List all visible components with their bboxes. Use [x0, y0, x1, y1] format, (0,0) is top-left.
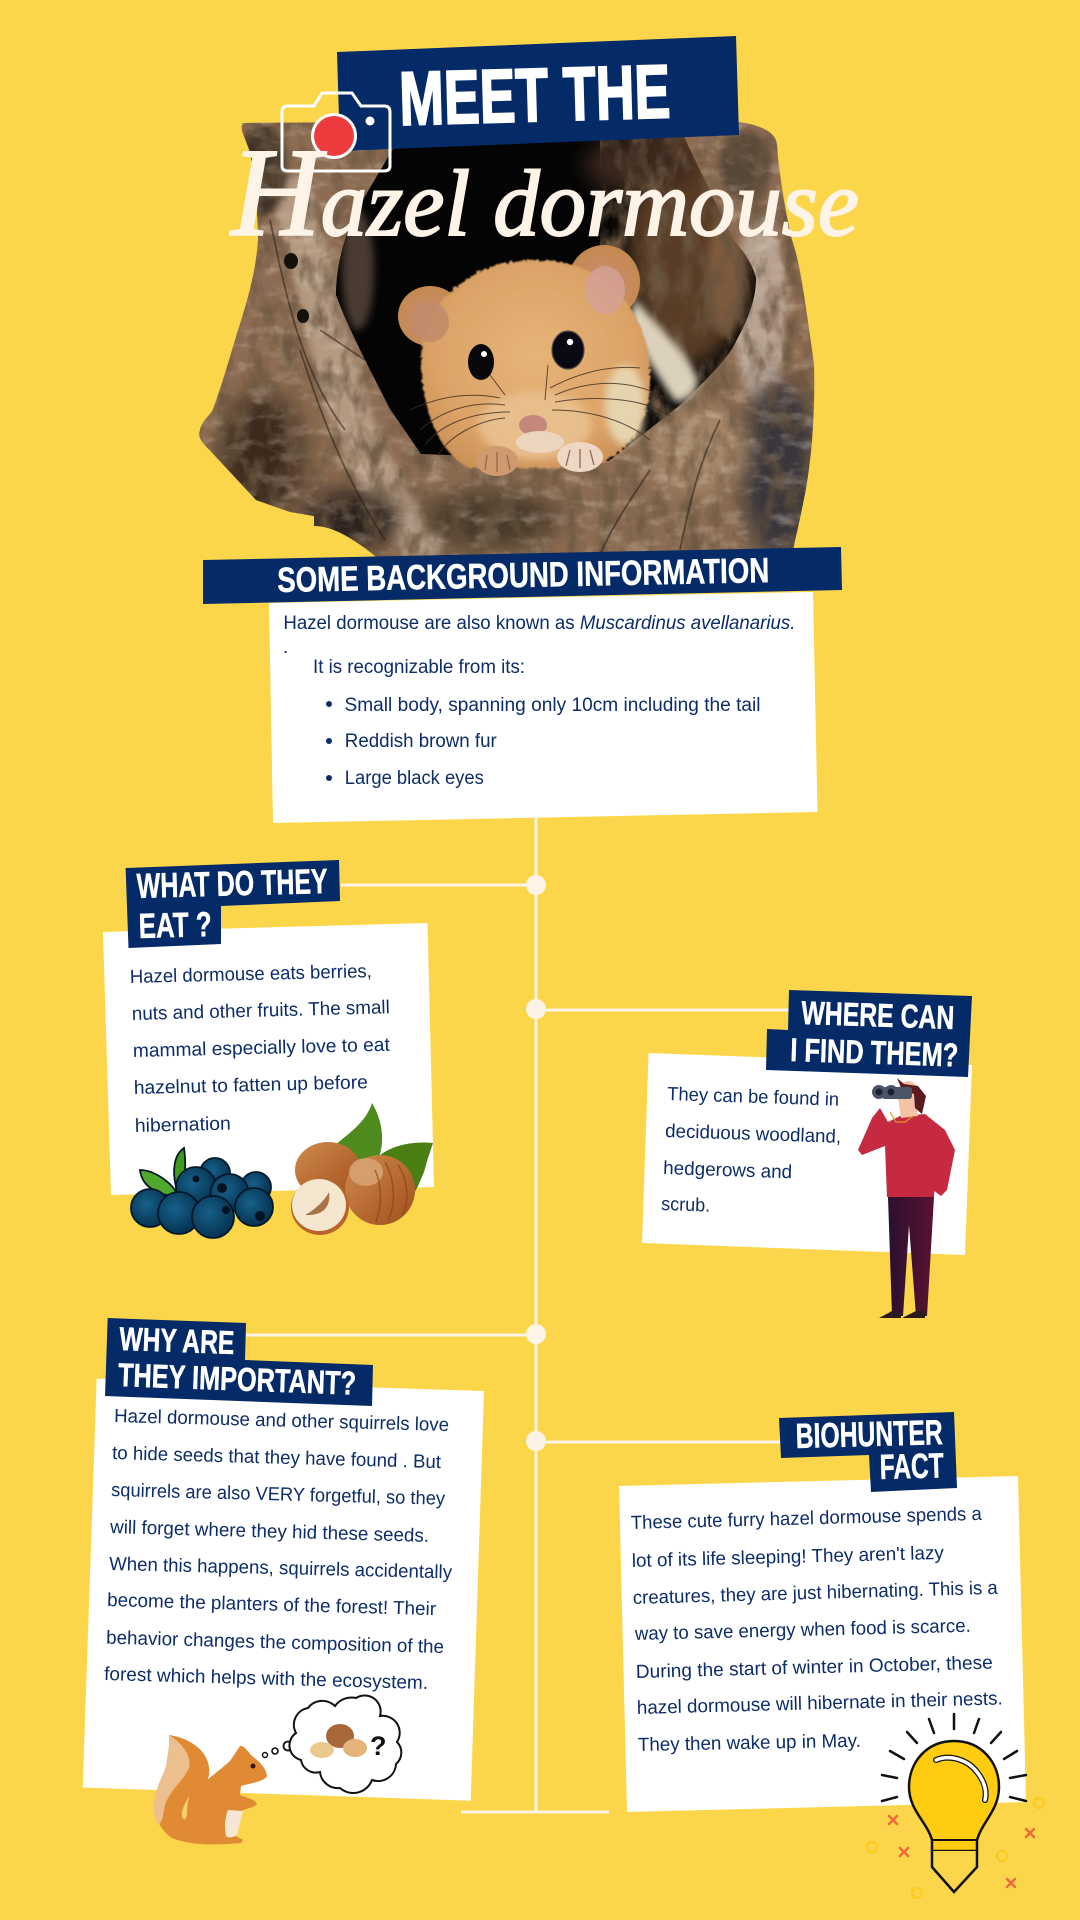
text: habitat: [661, 1084, 841, 1217]
text: importance: will forget where they hid these seeds.: [109, 1517, 429, 1547]
text: diet: Hazel dormouse eats berries,: [130, 961, 372, 988]
text: habitat: hedgerows and: [663, 1158, 792, 1183]
text: importance: behavior changes the composition of the: [106, 1628, 444, 1658]
text: diet: mammal especially love to eat: [133, 1035, 391, 1062]
title banner: meet the: MEET THE: [398, 49, 671, 142]
text: fact: These cute furry hazel dormouse spends a: [631, 1504, 982, 1534]
text: fact: way to save energy when food is scarce.: [634, 1616, 971, 1645]
heading: biohunter fact: BIOHUNTER: [795, 1413, 943, 1456]
heading: biohunter fact: FACT: [879, 1446, 944, 1487]
icon: hazelnuts: [291, 1103, 433, 1235]
icon: man with binoculars: [858, 1078, 955, 1318]
timeline connector: [246, 815, 790, 1812]
text: recognizable intro: It is recognizable from its:: [313, 657, 525, 678]
icon: light bulb: [882, 1714, 1026, 1892]
text: importance: When this happens, squirrels accidentally: [109, 1554, 453, 1583]
icon: camera: [282, 93, 390, 171]
title banner: meet the: [337, 36, 739, 151]
icon: thought bubble with nuts: ?: [370, 1731, 386, 1761]
text: background intro: Hazel dormouse are also known as Muscardinus avellanarius.: [283, 613, 795, 634]
panel: background information: [203, 547, 842, 823]
photo: dormouse in tree hollow: [190, 110, 830, 570]
icon: sparkle marks: [867, 1798, 1044, 1898]
text: importance: [104, 1406, 453, 1694]
list: traits: Reddish brown fur: [345, 731, 497, 752]
dormouse: [398, 245, 698, 476]
text: importance: forest which helps with the ecosystem.: [104, 1664, 428, 1694]
text: diet: [130, 961, 391, 1137]
text: habitat: deciduous woodland,: [665, 1121, 841, 1148]
list: traits: [326, 695, 760, 789]
text: diet: hazelnut to fatten up before: [134, 1072, 368, 1099]
title script: hazel dormouse: Hazel dormouse: [229, 124, 859, 263]
text: habitat: They can be found in: [667, 1084, 839, 1111]
text: fact: creatures, they are just hibernating. This is a: [633, 1578, 998, 1609]
text: fact: During the start of winter in October, these: [636, 1653, 993, 1683]
panel: where can i find them: [642, 990, 972, 1318]
heading: why are they important: THEY IMPORTANT?: [117, 1356, 357, 1402]
heading: why are they important: WHY ARE: [119, 1320, 235, 1361]
heading: where can i find them: I FIND THEM?: [790, 1031, 959, 1074]
text: diet: hibernation: [135, 1114, 231, 1137]
heading: what do they eat: WHAT DO THEY: [136, 862, 328, 906]
text: stray period: .: [283, 637, 288, 658]
text: importance: to hide seeds that they have found . But: [112, 1443, 442, 1473]
text: fact: [631, 1504, 1003, 1756]
text: fact: lot of its life sleeping! They aren't lazy: [632, 1543, 945, 1572]
panel: what do they eat: [103, 860, 434, 1238]
heading: biohunter fact: [779, 1412, 957, 1492]
heading: some background information: SOME BACKGROUND INFORMATION: [277, 551, 770, 600]
text: importance: Hazel dormouse and other squirrels love: [114, 1406, 449, 1436]
heading: what do they eat: EAT ?: [138, 905, 212, 946]
list: traits: Large black eyes: [345, 768, 484, 789]
text: fact: hazel dormouse will hibernate in their nests.: [637, 1688, 1003, 1719]
text: fact: They then wake up in May.: [638, 1731, 861, 1756]
list: traits: Small body, spanning only 10cm including the tail: [344, 695, 760, 716]
icon: thought bubble with nuts: [262, 1695, 401, 1793]
heading: what do they eat: [126, 860, 340, 948]
icon: blueberries: [131, 1148, 273, 1238]
text: diet: nuts and other fruits. The small: [132, 997, 390, 1025]
panel: biohunter fact: [619, 1412, 1044, 1898]
text: importance: become the planters of the forest! Their: [107, 1590, 437, 1620]
icon: squirrel: [154, 1735, 267, 1844]
heading: why are they important: [105, 1318, 373, 1406]
text: importance: squirrels are also VERY forgetful, so they: [111, 1480, 446, 1510]
panel: why are they important: [83, 1318, 484, 1844]
heading: where can i find them: [766, 990, 972, 1077]
text: habitat: scrub.: [661, 1194, 711, 1217]
heading: where can i find them: WHERE CAN: [801, 994, 955, 1036]
